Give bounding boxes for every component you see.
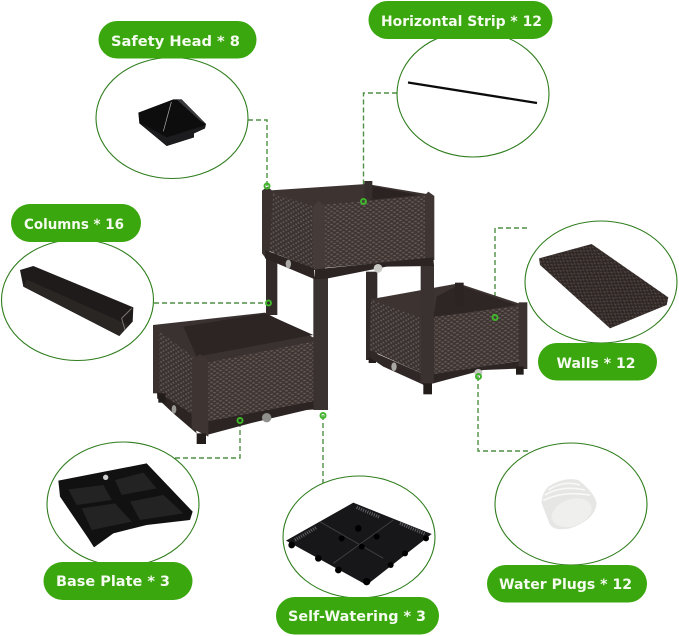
connector dots	[238, 184, 498, 423]
top planter rear legs	[266, 253, 377, 363]
icon: water plug	[542, 479, 597, 532]
icon: safety head cap	[138, 99, 206, 146]
connector: base plate	[175, 422, 240, 458]
callout: columns	[2, 204, 154, 360]
lower right planter	[368, 283, 527, 394]
connector: horizontal strip	[364, 93, 397, 201]
planter illustration	[153, 181, 527, 444]
callout: safety head	[96, 21, 256, 178]
icon: strip	[408, 82, 537, 103]
connector: safety head	[248, 120, 267, 186]
circle: safety head	[96, 58, 248, 178]
label: horizontal strip: Horizontal Strip * 12	[381, 14, 542, 30]
connector: columns	[154, 302, 268, 304]
label: safety head	[98, 21, 256, 58]
callout: walls	[525, 221, 677, 380]
callout: horizontal strip	[368, 1, 552, 157]
lower left planter	[153, 313, 328, 444]
top planter front legs	[313, 265, 434, 410]
label: horizontal strip	[368, 1, 552, 39]
label: water plugs: Water Plugs * 12	[499, 577, 632, 593]
label: walls: Walls * 12	[556, 356, 636, 372]
circle: horizontal strip	[397, 31, 549, 157]
label: self-watering: Self-Watering * 3	[288, 609, 426, 625]
connector: water plugs	[478, 376, 530, 451]
label: self-watering	[276, 597, 439, 634]
circle: self-watering	[283, 476, 435, 598]
label: columns: Columns * 16	[24, 217, 124, 233]
icon: wall panel	[539, 244, 668, 328]
circle: water plugs	[495, 443, 647, 565]
icon: column	[20, 266, 133, 336]
label: base plate	[44, 562, 192, 600]
label: water plugs	[487, 565, 647, 602]
circle: base plate	[47, 442, 199, 566]
callout: water plugs	[487, 443, 647, 602]
circle: columns	[2, 240, 154, 360]
icon: base plate	[58, 463, 193, 547]
label: columns	[11, 204, 141, 242]
connector: self-watering	[322, 415, 324, 483]
connector: walls	[495, 228, 527, 317]
callout: base plate	[44, 442, 199, 600]
circle: walls	[525, 221, 677, 343]
label: safety head: Safety Head * 8	[111, 34, 240, 50]
top planter box	[262, 181, 434, 279]
icon: self-watering plate	[286, 503, 432, 585]
label: base plate: Base Plate * 3	[56, 574, 170, 590]
callout: self-watering	[276, 476, 439, 634]
label: walls	[538, 343, 657, 380]
